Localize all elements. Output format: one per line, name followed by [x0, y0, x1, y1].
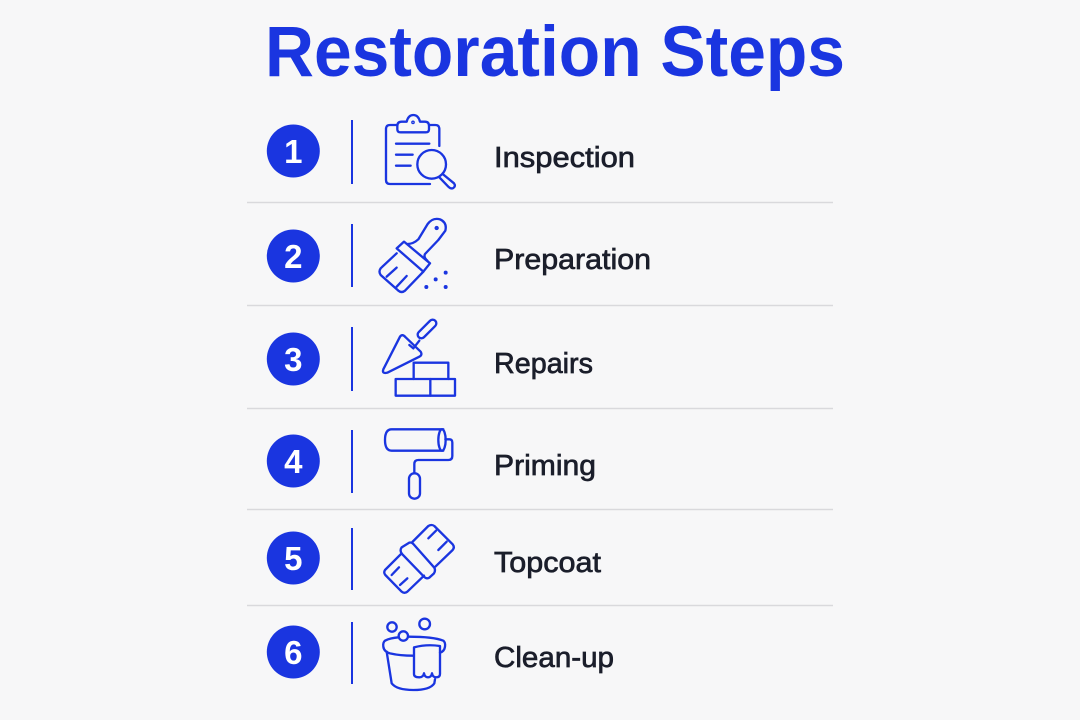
label: Preparation: Preparation [494, 244, 651, 276]
number badge 5 [267, 532, 320, 584]
number badge 2 [267, 230, 320, 282]
label: Repairs: Repairs [494, 348, 593, 380]
number badge 3 [267, 332, 320, 386]
number badge 2: 2 [284, 238, 302, 275]
icon: bucket with cloth and bubbles [383, 619, 445, 690]
label: Clean-up: Clean-up [494, 642, 614, 674]
icon: wide brush [384, 525, 454, 593]
icon: paint brush with specks [379, 219, 446, 292]
number badge 6: 6 [284, 634, 302, 671]
label: Inspection: Inspection [494, 142, 635, 174]
label: Topcoat: Topcoat [494, 547, 601, 579]
number badge 4: 4 [284, 443, 303, 480]
title: Restoration Steps [265, 13, 845, 92]
number badge 1 [267, 124, 320, 178]
icon: clipboard with magnifier [386, 115, 455, 188]
number badge 6 [267, 626, 320, 678]
number badge 3: 3 [284, 341, 302, 378]
icon: paint roller [385, 429, 452, 499]
icon: trowel and bricks [383, 318, 455, 396]
number badge 1: 1 [284, 133, 302, 170]
number badge 4 [267, 434, 320, 488]
label: Priming: Priming [494, 450, 596, 482]
number badge 5: 5 [284, 540, 302, 577]
